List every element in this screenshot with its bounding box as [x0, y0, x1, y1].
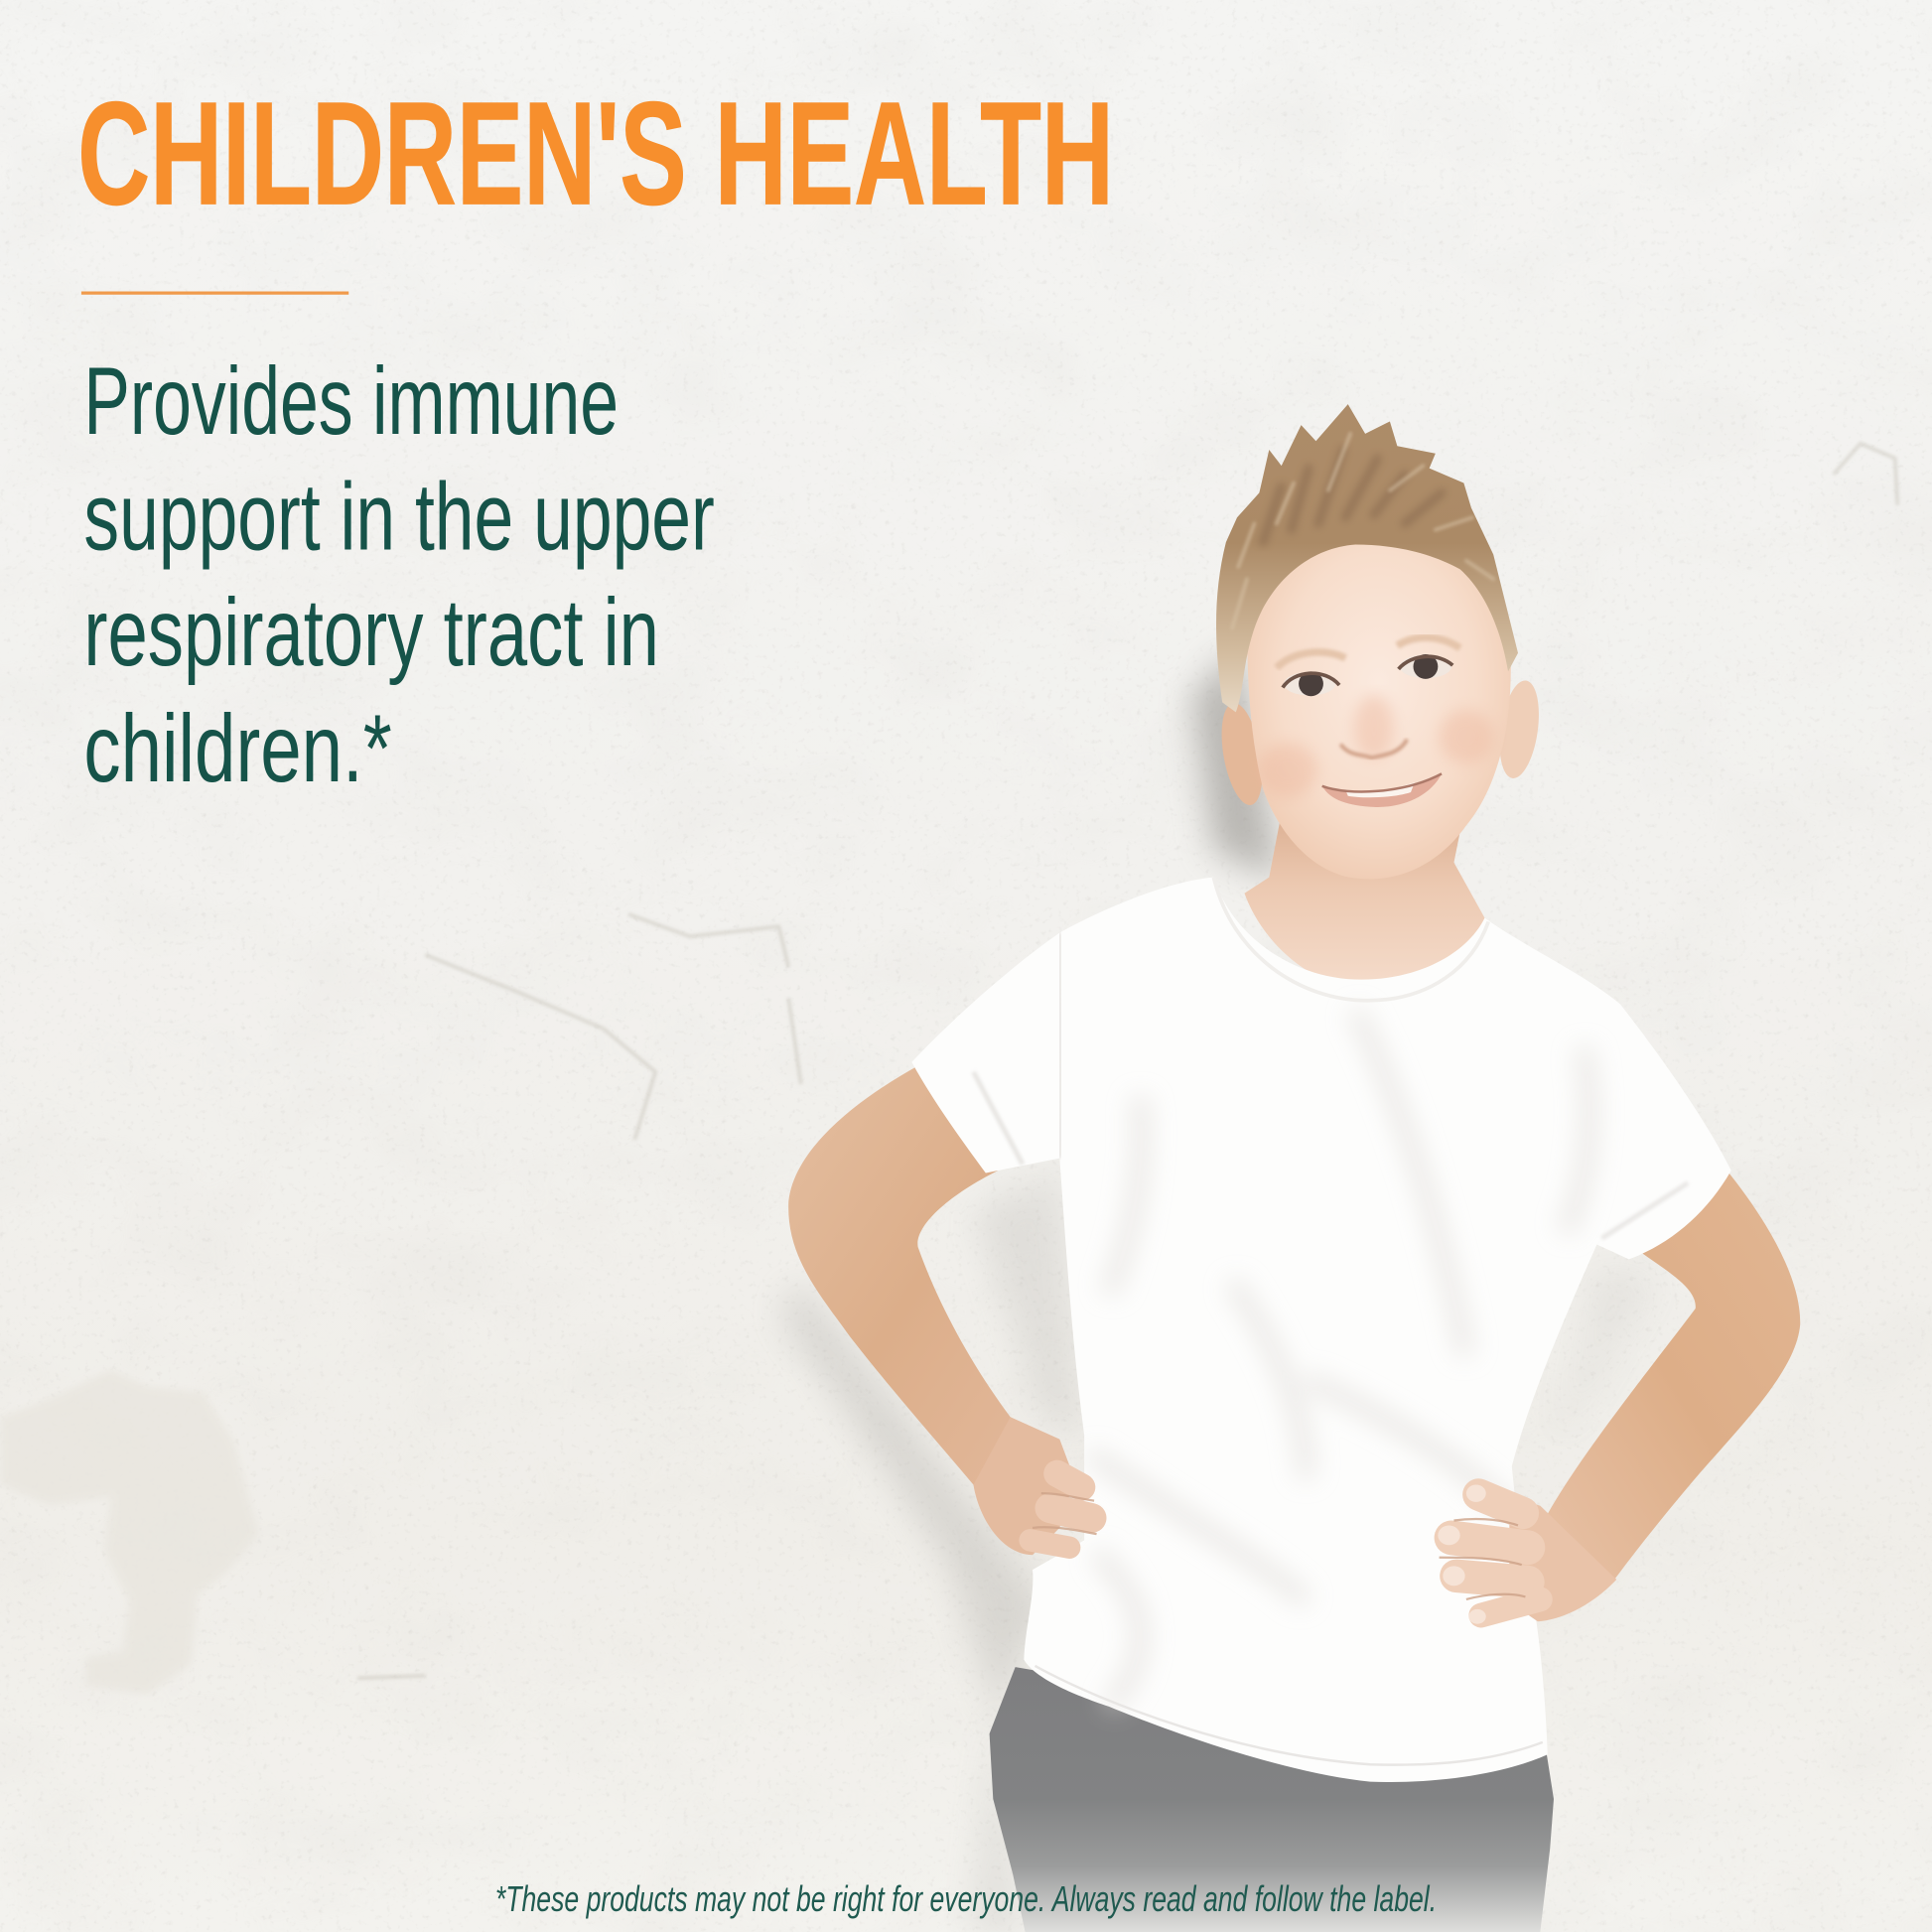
mouth — [1322, 773, 1442, 807]
right arm — [1540, 1169, 1800, 1584]
left hand — [973, 1417, 1097, 1555]
hair — [1216, 404, 1518, 712]
wall water stain — [0, 1370, 259, 1694]
body text: respiratory tract in — [83, 578, 659, 686]
eyebrows — [1277, 637, 1460, 668]
pants — [990, 1667, 1554, 1932]
face — [1247, 523, 1511, 879]
cast shadow on wall — [778, 647, 1657, 1932]
left arm — [788, 1066, 1059, 1484]
hair strands — [1232, 434, 1493, 628]
title: CHILDREN'S HEALTH — [77, 71, 1114, 235]
body text: children.* — [83, 694, 392, 802]
fingernails — [1438, 1484, 1486, 1624]
ears — [1215, 678, 1545, 808]
divider line — [81, 292, 348, 295]
body text: support in the upper — [83, 463, 715, 571]
footer disclaimer: *These products may not be right for everyone. Always read and follow the label. — [495, 1878, 1437, 1919]
nose — [1340, 740, 1407, 758]
t-shirt folds and collar — [973, 878, 1688, 1765]
wall cracks — [357, 444, 1897, 1678]
cheek blush — [1258, 695, 1493, 797]
t-shirt — [911, 878, 1731, 1782]
body text — [83, 346, 715, 802]
body text: Provides immune — [83, 346, 619, 455]
neck — [1244, 801, 1484, 990]
eyes — [1283, 654, 1452, 696]
right hand — [1438, 1484, 1616, 1624]
illustration: smiling boy leaning on the wall — [778, 404, 1800, 1932]
